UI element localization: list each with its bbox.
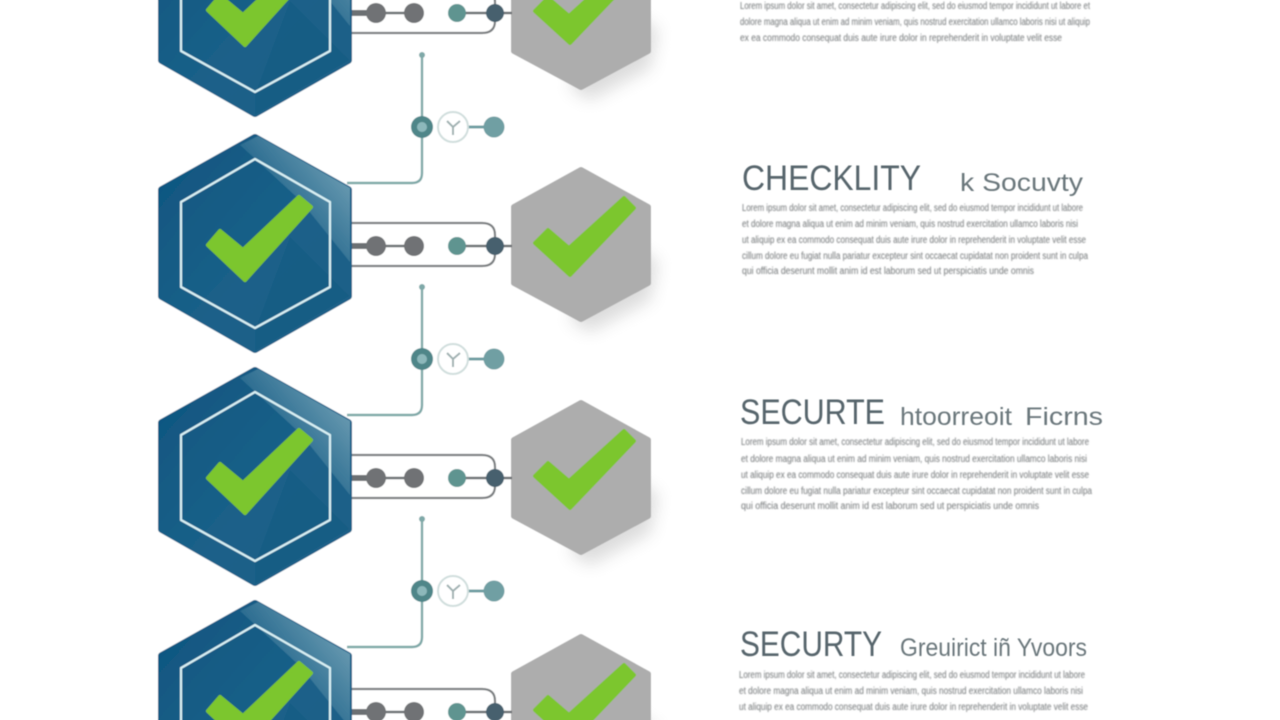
text block: row 3 body <box>741 437 1092 512</box>
text block: row 2 body: qui officia deserunt mollit anim id est laborum sed ut perspiciatis unde omnis <box>742 266 1034 277</box>
heading: row 3 <box>740 393 1103 432</box>
heading: row 4 <box>740 625 1087 664</box>
text block: row 3 body: cillum dolore eu fugiat nulla pariatur excepteur sint occaecat cupidatat non proident sunt in culpa <box>741 486 1092 497</box>
text block: row 2 body: et dolore magna aliqua ut enim ad minim veniam, quis nostrud exercitation ullamco laboris nisi <box>742 219 1078 230</box>
connector: link from row 4 hexagon up to row 3 <box>347 516 504 647</box>
text block: row 2 body <box>742 203 1088 277</box>
text block: row 4 body <box>739 670 1088 713</box>
connector: link from row 2 hexagon up to row 1 <box>347 52 504 183</box>
icon: row 4 blue shield hexagon <box>162 602 350 720</box>
heading: row 4: SECURTY <box>740 625 882 664</box>
text block: row 1 body: Lorem ipsum dolor sit amet, consectetur adipiscing elit, sed do eiusmod tempor incididunt ut labore et <box>740 1 1090 12</box>
text block: row 3 body: ut aliquip ex ea commodo consequat duis aute irure dolor in reprehenderit in voluptate velit esse <box>741 470 1089 481</box>
heading: row 2 <box>742 159 1084 198</box>
icon: row 4 grey hexagon check <box>514 637 658 720</box>
connector: row 4 rails and nodes <box>352 689 512 720</box>
connector: link from row 3 hexagon up to row 2 <box>347 284 504 415</box>
diagram: hexagons and connectors <box>0 0 720 720</box>
text block: row 2 body: ut aliquip ex ea commodo consequat duis aute irure dolor in reprehenderit in voluptate velit esse <box>742 235 1086 246</box>
text block: row 1 body: dolore magna aliqua ut enim ad minim veniam, quis nostrud exercitation ullamco laboris nisi ut aliquip <box>740 17 1090 28</box>
connector: row 1 rails and nodes <box>352 0 512 33</box>
heading: row 3: htoorreoit <box>900 403 1012 431</box>
heading: row 4: Greuirict iñ Yvoors <box>900 634 1087 662</box>
text block: row 1 body <box>740 1 1090 44</box>
heading: row 2: CHECKLITY <box>742 159 921 198</box>
heading: row 3: SECURTE <box>740 393 885 432</box>
text block: row 2 body: cillum dolore eu fugiat nulla pariatur excepteur sint occaecat cupidatat non proident sunt in culpa <box>742 251 1088 262</box>
icon: row 2 grey hexagon check <box>514 170 658 332</box>
icon: row 2 blue shield hexagon <box>162 136 350 351</box>
text block: row 4 body: Lorem ipsum dolor sit amet, consectetur adipiscing elit, sed do eiusmod tempor incididunt ut labore <box>739 670 1085 681</box>
heading: row 3: Ficrns <box>1025 403 1103 431</box>
heading: row 2: k Socuvty <box>960 169 1084 197</box>
connector: row 2 rails and nodes <box>352 223 512 266</box>
connector: row 3 rails and nodes <box>352 455 512 498</box>
text block: row 3 body: et dolore magna aliqua ut enim ad minim veniam, quis nostrud exercitation ullamco laboris nisi <box>741 454 1087 465</box>
icon: row 3 grey hexagon check <box>514 403 658 565</box>
icon: row 3 blue shield hexagon <box>162 369 350 584</box>
text block: row 1 body: ex ea commodo consequat duis aute irure dolor in reprehenderit in voluptate velit esse <box>740 33 1062 44</box>
text block: row 3 body: Lorem ipsum dolor sit amet, consectetur adipiscing elit, sed do eiusmod tempor incididunt ut labore <box>741 437 1089 448</box>
icon: row 1 green check on blue <box>208 0 311 45</box>
text block: row 2 body: Lorem ipsum dolor sit amet, consectetur adipiscing elit, sed do eiusmod tempor incididunt ut labore <box>742 203 1083 214</box>
icon: row 1 grey hexagon check <box>514 0 658 100</box>
icon: row 1 blue shield hexagon <box>162 0 350 115</box>
text block: row 4 body: et dolore magna aliqua ut enim ad minim veniam, quis nostrud exercitation ullamco laboris nisi <box>739 686 1083 697</box>
text block: row 4 body: ut aliquip ex ea commodo consequat duis aute irure dolor in reprehenderit in voluptate velit esse <box>739 702 1088 713</box>
text block: row 3 body: qui officia deserunt mollit anim id est laborum sed ut perspiciatis unde omnis <box>741 501 1039 512</box>
